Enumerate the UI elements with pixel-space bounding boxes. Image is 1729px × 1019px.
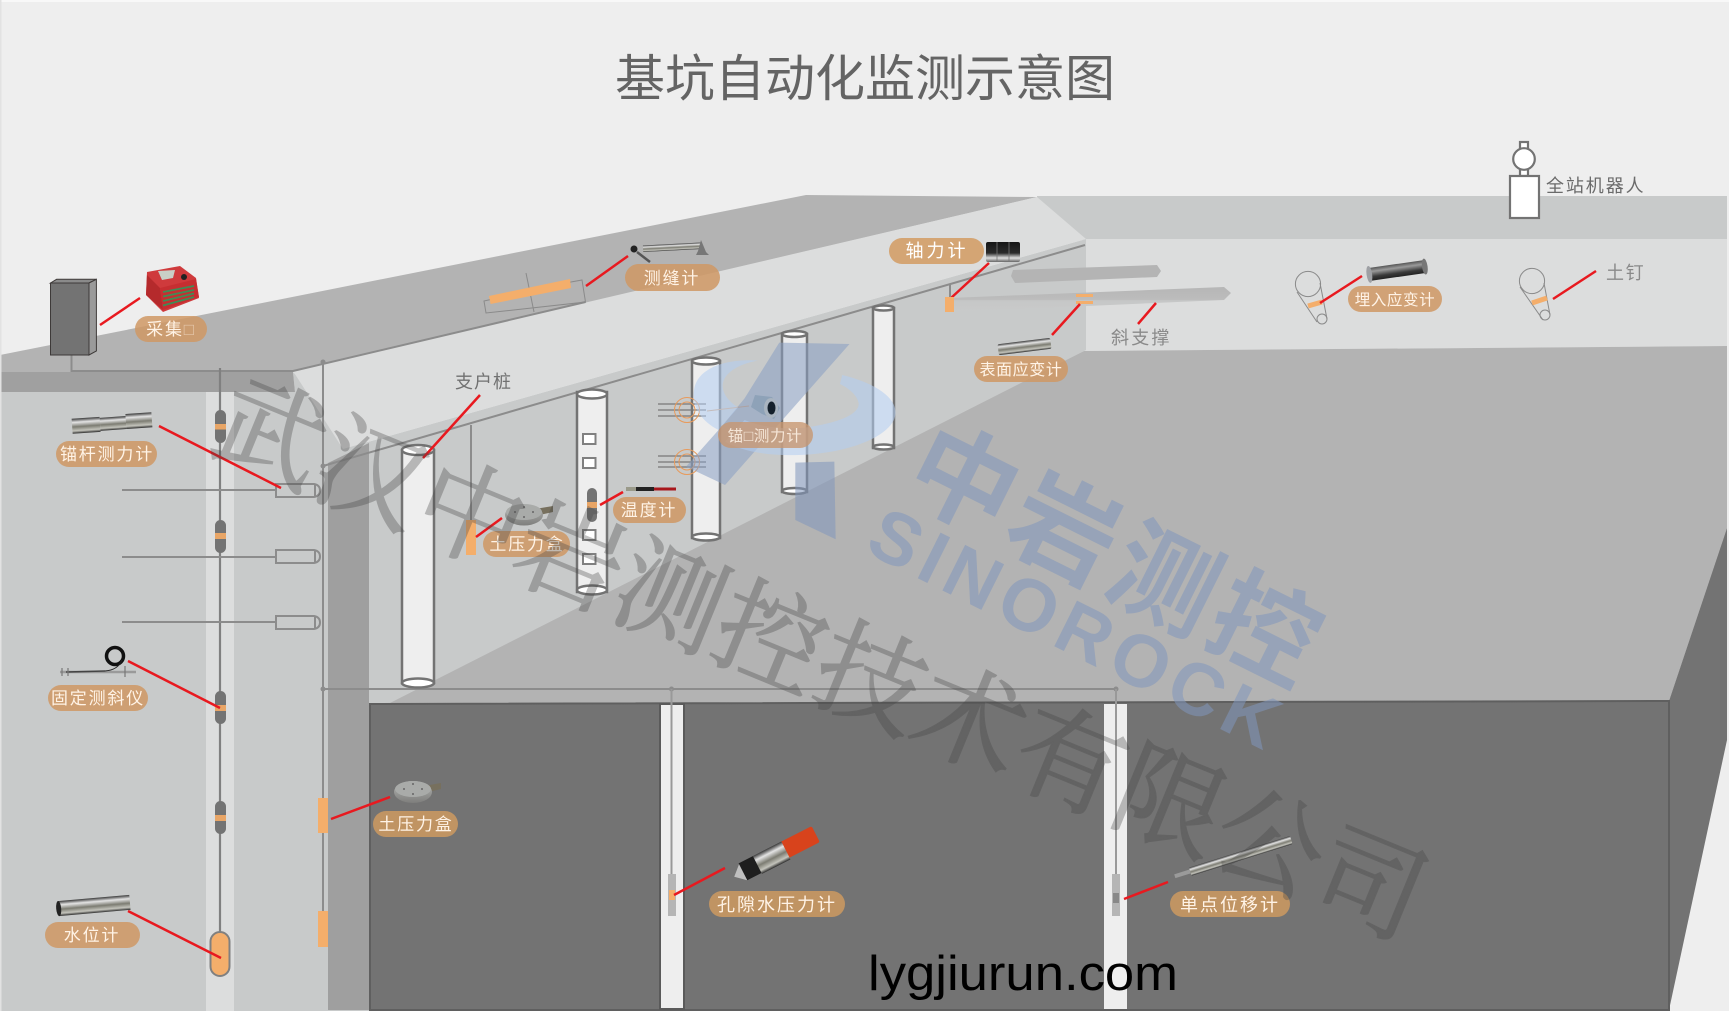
label: 土压力盒 lower: 土压力盒: [378, 815, 454, 834]
label: 土压力盒 upper: [483, 531, 570, 557]
icon: single-point displacement gauge: [1174, 836, 1293, 881]
leader: piezometer: [674, 868, 725, 895]
label: 固定测斜仪: [48, 685, 148, 711]
borehole 1: [660, 689, 684, 1009]
logo symbol: [686, 343, 896, 539]
embedded earth pressure pad: [466, 425, 476, 555]
icon: surface strain gauge: [998, 338, 1051, 355]
icon: earth pressure cell lower: [394, 781, 441, 803]
label: 孔隙水压力计: [709, 891, 845, 917]
leader: inclined strut: [1138, 303, 1156, 324]
left retaining wall: [0, 372, 369, 1011]
leader: anchor rod gauge: [159, 426, 281, 488]
icon: thermometer: [626, 487, 676, 491]
back wall lower band: [1084, 239, 1727, 351]
leader: thermometer: [600, 492, 623, 505]
borehole 2: [1104, 689, 1127, 1009]
website text: lygjiurun.com: [868, 947, 1178, 1001]
pile 4: [782, 331, 807, 494]
icon: piezometer: [730, 826, 821, 886]
leader: displacement gauge: [1124, 882, 1168, 899]
leader: soil nail: [1553, 271, 1596, 299]
icon: anchor load cell: [751, 395, 780, 419]
anchor head upper: [658, 398, 749, 422]
pit right side: [1669, 528, 1727, 1010]
company watermark: 武汉中岩测控技术有限公司: [195, 333, 1453, 969]
label: 轴力计: [889, 238, 984, 264]
icon: water level gauge: [56, 895, 131, 916]
inclinometer string: [215, 368, 226, 933]
label: 水位计: 水位计: [64, 926, 120, 945]
label: 土压力盒 upper: 土压力盒: [489, 535, 565, 554]
pile 5: [873, 306, 894, 450]
axial gauge mount: [945, 285, 954, 312]
front strut: [950, 287, 1231, 312]
label: 温度计: [613, 497, 686, 523]
top edge: [0, 0, 1729, 2]
leader: water level gauge: [128, 911, 221, 958]
leader: surface strain gauge: [1052, 304, 1080, 335]
icon: total station robot: [1510, 142, 1539, 218]
anchor head lower: [658, 450, 706, 474]
icon: fixed inclinometer: [60, 648, 136, 677]
leader: earth pressure cell: [476, 518, 502, 537]
label: 土钉: 土钉: [1606, 263, 1645, 283]
ground edge band: [0, 372, 295, 392]
leader: wall earth pressure cell: [331, 797, 390, 819]
icon: water level sensor in borehole: [210, 932, 230, 976]
label: 斜支撑: 斜支撑: [1111, 328, 1171, 348]
dark vertical wall strip: [328, 443, 369, 1010]
icon: embedded strain gauge: [1365, 258, 1429, 283]
pile 3: [692, 358, 720, 540]
pile 1: [402, 445, 434, 688]
leader: fixed inclinometer: [128, 661, 220, 708]
right retaining wall: [343, 239, 1086, 705]
label: 单点位移计: [1170, 891, 1290, 917]
label: 全站机器人: 全站机器人: [1546, 176, 1646, 196]
label: 测缝计: [625, 264, 720, 291]
icon: red data logger: [146, 266, 199, 312]
logo text: 中岩测控: 中岩测控: [890, 405, 1343, 711]
label: 表面应变计: [974, 356, 1068, 382]
data cabinet: [50, 279, 96, 355]
leader: pile: [423, 395, 480, 458]
top ground surface: [0, 195, 1037, 372]
icon: crack meter: [630, 240, 709, 262]
label: 固定测斜仪: 固定测斜仪: [51, 689, 145, 708]
label: 采集: [135, 316, 207, 342]
label: 采集: 采集□: [146, 320, 196, 339]
icon: anchor load cell: [72, 412, 152, 434]
icon: earth pressure cell upper: [505, 504, 553, 526]
pale vertical strip: [206, 392, 234, 1011]
wall earth pressure pads: [318, 798, 328, 947]
label: 表面应变计: 表面应变计: [979, 360, 1063, 379]
left edge: [0, 0, 2, 1011]
soil nail diagram 1: [1295, 271, 1327, 324]
label: 锚杆测力计: 锚杆测力计: [60, 445, 154, 464]
soil nail diagram 2: [1519, 268, 1550, 320]
label: 埋入应变计: 埋入应变计: [1355, 290, 1435, 309]
cable network: [72, 245, 1118, 911]
logo text: SINOROCK: SINOROCK: [856, 491, 1300, 768]
anchor rods: [122, 484, 320, 629]
icon: axial force gauge: [986, 242, 1020, 262]
label: 锚□测力计: [718, 422, 813, 448]
label: 轴力计: 轴力计: [906, 241, 968, 261]
label: 支户桩: 支户桩: [455, 372, 512, 392]
pile 2 with windows: [577, 390, 607, 594]
leader: cabinet to logger: [100, 298, 140, 325]
label: 锚□测力计: 锚□测力计: [728, 427, 802, 445]
crack on ground with crack meter: [484, 273, 586, 313]
label: 孔隙水压力计: 孔隙水压力计: [717, 895, 837, 915]
excavation floor: [390, 346, 1727, 703]
label: 锚杆测力计: [56, 441, 157, 467]
strain marks on strut: [1076, 294, 1093, 304]
back wall upper band: [1037, 196, 1727, 240]
leader: embedded strain gauge: [1320, 276, 1362, 303]
label: 温度计: 温度计: [621, 501, 677, 520]
title: 基坑自动化监测示意图: [615, 51, 1115, 107]
back strut: [1011, 265, 1161, 283]
label: 埋入应变计: [1348, 286, 1442, 312]
leader: crack meter: [586, 256, 628, 286]
label: 水位计: [45, 922, 140, 948]
label: 测缝计: 测缝计: [644, 269, 700, 288]
pale wedge at wall crest: [293, 197, 1086, 449]
label: 单点位移计: 单点位移计: [1180, 895, 1280, 915]
bottom white margin: [0, 1011, 1729, 1019]
excavation pit front: [370, 701, 1669, 1010]
label: 土压力盒 lower: [373, 811, 458, 837]
leader: axial gauge: [951, 263, 989, 298]
